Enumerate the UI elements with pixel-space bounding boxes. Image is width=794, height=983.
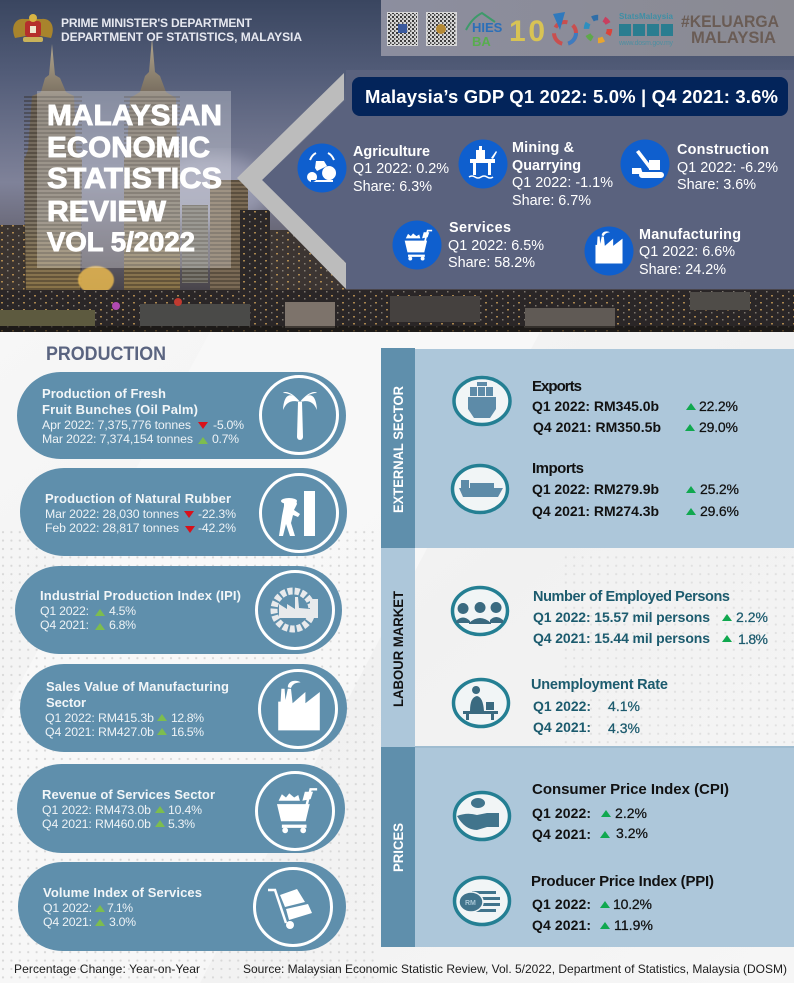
panel: volume index of services: 3.0% xyxy=(109,915,136,929)
icon: national emblem xyxy=(13,14,53,42)
logo: HIES BA 2022 xyxy=(466,13,503,49)
GDP headline pill: Malaysia’s GDP Q1 2022: 5.0% | Q4 2021: 3.6% xyxy=(365,86,778,107)
translucent title box xyxy=(37,91,231,268)
icon: cargo ship side xyxy=(452,466,508,512)
tab: external sector xyxy=(381,348,415,548)
panel: revenue of services: Revenue of Services Sector xyxy=(42,787,215,802)
producer price index: Q4 2021: xyxy=(532,917,591,933)
icon: stacked ringgit coins: RM xyxy=(465,900,476,907)
sector: mining and quarrying: Mining & xyxy=(512,140,574,156)
panel: fresh fruit bunches: Apr 2022: 7,375,776 tonnes xyxy=(42,418,191,432)
logo: HIES BA 2022: BA xyxy=(472,34,491,49)
consumer price index: 2.2% xyxy=(615,805,647,821)
number of employed persons: Number of Employed Persons xyxy=(533,589,730,605)
logo: StatsMalaysia social xyxy=(618,12,674,47)
panel: revenue of services: 5.3% xyxy=(168,817,195,831)
panel: industrial production index: Q1 2022: xyxy=(40,604,89,618)
sector: mining and quarrying: Quarrying xyxy=(512,158,581,174)
tab: labour market: LABOUR MARKET xyxy=(390,591,406,707)
icon: QR code website xyxy=(426,12,457,46)
exports xyxy=(532,378,738,435)
panel: industrial production index: 4.5% xyxy=(109,604,136,618)
logo: 10 years: 10 xyxy=(509,15,545,48)
title: ECONOMIC xyxy=(47,132,210,164)
sector: manufacturing: Q1 2022: 6.6% xyxy=(639,244,735,260)
panel: revenue of services: Q1 2022: RM473.0b xyxy=(42,803,151,817)
panel: industrial production index: Q4 2021: xyxy=(40,618,89,632)
footnote: source: Source: Malaysian Economic Statistic Review, Vol. 5/2022, Department of Statistics, Malaysia (DOSM) xyxy=(243,962,787,976)
producer price index: Producer Price Index (PPI) xyxy=(531,873,714,890)
unemployment rate: Unemployment Rate xyxy=(531,677,668,693)
GDP headline pill xyxy=(352,77,788,116)
sector: construction xyxy=(620,140,778,193)
panel: industrial production index: Industrial Production Index (IPI) xyxy=(40,588,241,603)
sector: agriculture: Share: 6.3% xyxy=(353,179,432,195)
panel: volume index of services: Q1 2022: xyxy=(43,901,92,915)
icon: tractor xyxy=(298,144,346,192)
sector: manufacturing: Share: 24.2% xyxy=(639,262,726,278)
icon: container ship front xyxy=(454,378,510,424)
panel: volume index of services: 7.1% xyxy=(107,901,133,915)
consumer price index: Q1 2022: xyxy=(532,805,591,821)
sector: services: Q1 2022: 6.5% xyxy=(448,238,544,254)
logo: swirl xyxy=(553,12,576,44)
department name xyxy=(61,16,302,44)
panel: prices xyxy=(381,746,794,947)
consumer price index: Consumer Price Index (CPI) xyxy=(532,781,729,798)
producer price index: 10.2% xyxy=(613,896,652,912)
producer price index xyxy=(531,873,714,933)
icon: unemployed person xyxy=(454,680,508,726)
sector: mining and quarrying: Q1 2022: -1.1% xyxy=(512,175,613,191)
header photo: city skyline xyxy=(0,0,794,332)
icon: employed persons xyxy=(452,588,508,634)
panel: natural rubber xyxy=(20,468,347,556)
unemployment rate: Q4 2021: xyxy=(533,719,591,735)
panel: sales value of manufacturing: 12.8% xyxy=(171,711,204,725)
panel: industrial production index: 6.8% xyxy=(109,618,136,632)
tab: prices: PRICES xyxy=(390,823,406,872)
icon: hand trolley xyxy=(268,889,312,929)
panel: fresh fruit bunches: Production of Fresh xyxy=(42,386,166,401)
icon: crane xyxy=(620,140,670,188)
imports: Imports xyxy=(532,460,584,477)
icon: factory xyxy=(584,226,634,276)
unemployment rate: 4.1% xyxy=(608,698,640,714)
sector: mining and quarrying: Share: 6.7% xyxy=(512,193,591,209)
title: REVIEW xyxy=(47,196,167,228)
panel: sales value of manufacturing: 16.5% xyxy=(171,725,204,739)
title: VOL 5/2022 xyxy=(47,227,195,257)
panel: sales value of manufacturing xyxy=(20,664,347,752)
tab: prices xyxy=(381,747,415,947)
number of employed persons: 1.8% xyxy=(738,631,768,647)
title: STATISTICS xyxy=(47,163,222,195)
panel: volume index of services: Q4 2021: xyxy=(43,915,92,929)
sector: construction: Q1 2022: -6.2% xyxy=(677,160,778,176)
sector: agriculture: Agriculture xyxy=(353,144,430,160)
sector: manufacturing xyxy=(584,226,741,278)
number of employed persons: 2.2% xyxy=(736,609,768,625)
icon: factory xyxy=(278,681,320,730)
panel: fresh fruit bunches: 0.7% xyxy=(212,432,239,446)
logo: #KeluargaMalaysia xyxy=(681,12,779,47)
page background xyxy=(0,332,794,983)
unemployment rate: Q1 2022: xyxy=(533,698,591,714)
number of employed persons xyxy=(533,589,768,647)
footnote: percentage change: Percentage Change: Year-on-Year xyxy=(14,962,200,976)
number of employed persons: Q1 2022: 15.57 mil persons xyxy=(533,609,710,625)
unemployment rate xyxy=(531,677,668,736)
panel: fresh fruit bunches: Fruit Bunches (Oil Palm) xyxy=(42,402,198,417)
icon: oil rig xyxy=(458,140,508,188)
exports: Q4 2021: RM350.5b xyxy=(533,419,661,435)
panel: revenue of services xyxy=(17,764,345,853)
logo: #KeluargaMalaysia: #KELUARGA xyxy=(681,12,779,31)
panel: revenue of services: Q4 2021: RM460.0b xyxy=(42,817,151,831)
panel: volume index of services: Volume Index of Services xyxy=(43,885,202,900)
icon: gear and factory xyxy=(274,591,318,629)
panel: labour market xyxy=(381,548,768,747)
consumer price index: 3.2% xyxy=(616,825,648,841)
unemployment rate: 4.3% xyxy=(608,720,640,736)
panel: external sector xyxy=(381,348,794,548)
panel: sales value of manufacturing: Q1 2022: RM415.3b xyxy=(45,711,154,725)
icon: QR code facebook xyxy=(387,12,418,46)
imports: Q1 2022: RM279.9b xyxy=(532,481,659,497)
panel: natural rubber: Mar 2022: 28,030 tonnes xyxy=(45,507,179,521)
panel: fresh fruit bunches: Mar 2022: 7,374,154 tonnes xyxy=(42,432,193,446)
sector: agriculture xyxy=(298,144,449,195)
sector: services: Services xyxy=(449,220,511,236)
GDP panel with chevron xyxy=(237,70,794,289)
logo: #KeluargaMalaysia: MALAYSIA xyxy=(691,28,776,47)
heading: production: PRODUCTION xyxy=(46,344,166,365)
consumer price index: Q4 2021: xyxy=(532,826,591,842)
title: MALAYSIAN xyxy=(47,100,222,132)
sector: agriculture: Q1 2022: 0.2% xyxy=(353,161,449,177)
icon: rubber tapper xyxy=(279,491,315,536)
exports: Q1 2022: RM345.0b xyxy=(532,398,659,414)
title xyxy=(47,100,222,257)
number of employed persons: Q4 2021: 15.44 mil persons xyxy=(533,630,710,646)
panel: natural rubber: -22.3% xyxy=(198,507,236,521)
panel: sales value of manufacturing: Q4 2021: RM427.0b xyxy=(45,725,154,739)
panel: industrial production index xyxy=(15,566,342,654)
logo: StatsMalaysia social: StatsMalaysia xyxy=(619,12,674,21)
panel: fresh fruit bunches xyxy=(17,372,346,459)
producer price index: Q1 2022: xyxy=(532,896,591,912)
icon: hand with coin xyxy=(454,792,510,840)
icon: shopping cart xyxy=(392,220,442,270)
icon: shopping cart xyxy=(277,789,317,833)
exports: 22.2% xyxy=(699,398,738,414)
panel: fresh fruit bunches: -5.0% xyxy=(213,418,244,432)
exports: 29.0% xyxy=(699,419,738,435)
logo band xyxy=(381,0,794,56)
panel: natural rubber: Production of Natural Rubber xyxy=(45,491,231,506)
sector: services xyxy=(392,220,544,271)
sector: services: Share: 58.2% xyxy=(448,255,535,271)
panel: volume index of services xyxy=(18,862,346,951)
consumer price index xyxy=(532,781,729,842)
sector: construction: Share: 3.6% xyxy=(677,177,756,193)
panel: natural rubber: -42.2% xyxy=(198,521,236,535)
panel: revenue of services: 10.4% xyxy=(168,803,202,817)
panel: sales value of manufacturing: Sector xyxy=(46,695,86,710)
imports: 29.6% xyxy=(700,503,739,519)
sector: manufacturing: Manufacturing xyxy=(639,227,741,243)
sector: mining and quarrying xyxy=(458,140,613,209)
sector: construction: Construction xyxy=(677,142,769,158)
imports xyxy=(532,460,739,519)
panel: sales value of manufacturing: Sales Value of Manufacturing xyxy=(46,679,229,694)
logo: HIES BA 2022: HIES xyxy=(472,20,503,35)
exports: Exports xyxy=(532,378,582,395)
imports: 25.2% xyxy=(700,481,739,497)
tab: external sector: EXTERNAL SECTOR xyxy=(390,386,406,513)
icon: oil palm xyxy=(283,392,317,440)
department name: PRIME MINISTER'S DEPARTMENT xyxy=(61,16,253,30)
panel: natural rubber: Feb 2022: 28,817 tonnes xyxy=(45,521,179,535)
icon: stacked ringgit coins xyxy=(454,878,510,924)
producer price index: 11.9% xyxy=(614,917,653,933)
department name: DEPARTMENT OF STATISTICS, MALAYSIA xyxy=(61,30,302,44)
logo: StatsMalaysia social: www.dosm.gov.my xyxy=(618,40,674,47)
tab: labour market xyxy=(381,548,415,747)
logo: SDG wheel xyxy=(586,18,610,40)
imports: Q4 2021: RM274.3b xyxy=(532,503,659,519)
